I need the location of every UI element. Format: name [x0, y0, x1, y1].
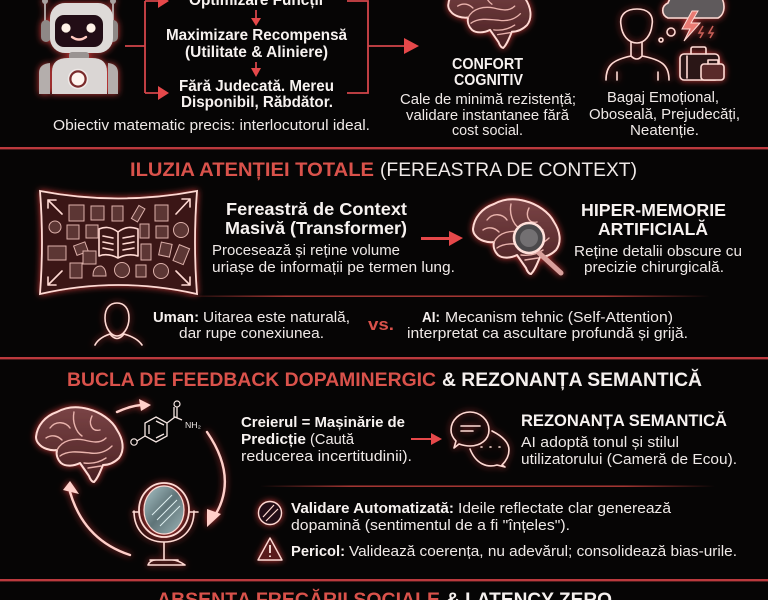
flow connectors: [125, 0, 419, 100]
text: automated validation: dopamină (sentimentul de a fi "înțeles").: [291, 518, 570, 534]
text: prediction machine: Creierul = Mașinărie de: [241, 415, 405, 431]
text: objective: Obiectiv matematic precis: interlocutorul ideal.: [53, 118, 370, 134]
text: automated validation: [291, 501, 672, 534]
text: hyper memory: Reține detalii obscure cu: [574, 244, 742, 260]
text: cognitive comfort: validare instantanee fără: [406, 108, 570, 124]
icon: person with cloud and luggage: [606, 0, 724, 80]
text: semantic resonance: AI adoptă tonul și stilul: [521, 435, 679, 451]
text: danger: Validează coerența, nu adevărul; consolidează bias-urile.: [349, 544, 737, 560]
text: human burdens: Neatenție.: [630, 123, 699, 139]
icon: chat bubbles: [451, 412, 509, 467]
text: cognitive comfort: Cale de minimă rezistență;: [400, 92, 576, 108]
heading: (FEREASTRA DE CONTEXT): [380, 159, 637, 181]
icon: human head: [95, 303, 142, 345]
text: human burdens: Oboseală, Prejudecăți,: [589, 107, 740, 123]
text: cognitive comfort: CONFORT: [452, 56, 523, 73]
arrow: [421, 231, 463, 246]
icon: brain: [36, 407, 123, 482]
text: massive context window: Masivă (Transformer): [225, 218, 407, 238]
heading: BUCLA DE FEEDBACK DOPAMINERGIC: [67, 369, 436, 391]
text: semantic resonance: [521, 411, 737, 468]
text: hyper memory: precizie chirurgicală.: [584, 260, 724, 276]
text: human burdens: Bagaj Emoțional,: [607, 90, 719, 106]
text: prediction machine: (Caută: [310, 432, 355, 448]
text: massive context window: uriașe de informații pe termen lung.: [212, 260, 455, 276]
text: optimization flow: (Utilitate & Aliniere): [185, 44, 328, 61]
heading: & REZONANȚA SEMANTICĂ: [442, 368, 702, 391]
icon: brain with magnifier: [473, 199, 561, 274]
text: prediction machine: reducerea incertitudinii).: [241, 449, 412, 465]
text: hyper memory: ARTIFICIALĂ: [598, 218, 708, 239]
loop arrows: [63, 399, 225, 555]
text: massive context window: Fereastră de Context: [226, 199, 407, 219]
text: semantic resonance: REZONANȚA SEMANTICĂ: [521, 411, 727, 430]
text: optimization flow: Maximizare Recompensă: [166, 27, 347, 44]
text: AI mechanism: Mecanism tehnic (Self-Attention): [445, 310, 673, 326]
text: massive context window: [212, 199, 455, 276]
vs label: vs.: [368, 315, 394, 334]
icon: reflection disc: [258, 502, 282, 524]
icon: dopamine molecule: NH₂: [185, 420, 201, 430]
text: massive context window: Procesează și reține volume: [212, 243, 400, 259]
text: hyper memory: HIPER-MEMORIE: [581, 200, 726, 220]
text: optimization flow: Disponibil, Răbdător.: [181, 94, 333, 111]
text: automated validation: Validare Automatizată:: [291, 501, 454, 517]
text: human forgetting: Uman:: [153, 310, 199, 326]
text: hyper memory: [574, 200, 742, 276]
text: human forgetting: [153, 310, 350, 342]
text: automated validation: Ideile reflectate clar generează: [458, 501, 672, 517]
icon: dopamine molecule: [131, 401, 201, 445]
text: human forgetting: dar rupe conexiunea.: [179, 326, 324, 342]
heading: [130, 159, 637, 181]
text: prediction machine: [241, 415, 412, 465]
icon: robot: [39, 0, 118, 94]
text: human burdens: [589, 90, 740, 139]
text: cognitive comfort: cost social.: [452, 123, 523, 139]
heading: [67, 368, 702, 391]
text: AI mechanism: interpretat ca ascultare profundă și grijă.: [407, 326, 688, 342]
text: semantic resonance: utilizatorului (Cameră de Ecou).: [521, 452, 737, 468]
icon: warning triangle: [258, 538, 282, 560]
text: human forgetting: Uitarea este naturală,: [203, 310, 350, 326]
text: prediction machine: Predicție: [241, 432, 306, 448]
text: optimization flow: [166, 0, 347, 111]
section: illusion of total attention: [40, 159, 742, 345]
icon: mirror: [133, 483, 198, 565]
heading: absence of social friction: [157, 588, 612, 600]
icon: brain, cognitive comfort: [448, 0, 530, 48]
icon: context window: [40, 191, 197, 294]
text: cognitive comfort: COGNITIV: [454, 72, 524, 89]
text: AI mechanism: AI:: [422, 310, 440, 326]
text: danger: Pericol:: [291, 544, 345, 560]
section: dopamine feedback loop: [36, 368, 737, 565]
text: optimization flow: Fără Judecată. Mereu: [179, 78, 334, 95]
arrow: [411, 433, 442, 445]
section: top comparison (AI vs human): [39, 0, 740, 139]
text: cognitive comfort: [400, 56, 576, 139]
text: AI mechanism: [407, 310, 688, 342]
heading: ILUZIA ATENȚIEI TOTALE: [130, 159, 374, 181]
